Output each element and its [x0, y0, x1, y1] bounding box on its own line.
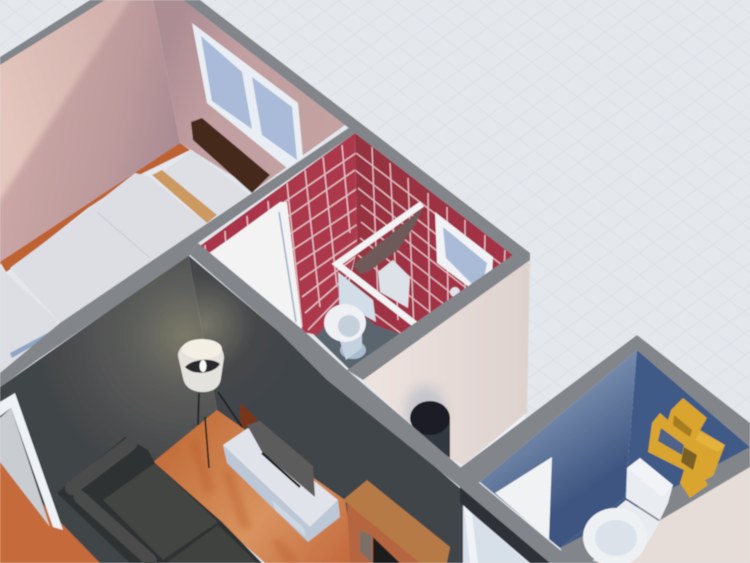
fireplace	[343, 480, 450, 563]
dark wall right	[188, 255, 480, 563]
shelf right highlight	[695, 432, 725, 452]
blue wall right	[560, 350, 750, 555]
bedroom window	[192, 23, 303, 168]
bedroom floor strip	[0, 143, 190, 272]
bath floor base	[312, 300, 412, 370]
room: living room	[0, 255, 480, 563]
lower doorway	[463, 505, 527, 563]
tap	[450, 287, 460, 297]
tile grout right	[352, 146, 506, 334]
shelf top opening	[673, 415, 692, 437]
shower rail	[337, 204, 422, 328]
pale exterior wall	[363, 258, 530, 465]
red tiled wall left	[197, 133, 357, 335]
wall: bedroom and bath back	[183, 0, 530, 380]
mattress	[10, 173, 207, 323]
doorway white frame	[0, 393, 63, 530]
shelf left opening	[658, 428, 684, 455]
pale wall lower right	[588, 467, 750, 563]
wall stripe	[463, 414, 527, 473]
toilet tank	[378, 260, 410, 308]
bed runner	[152, 170, 217, 223]
floor streaks	[190, 438, 300, 563]
pale wall bin shadow	[405, 386, 445, 434]
wall: bedroom divider	[0, 127, 355, 387]
shower glass	[338, 272, 376, 322]
waste bin	[410, 401, 450, 458]
shelf unit	[648, 398, 725, 498]
left room floor	[0, 460, 100, 563]
headboard	[191, 118, 270, 193]
shelf centre opening	[681, 447, 697, 470]
bathroom door	[210, 202, 302, 330]
blue bath toilet	[583, 458, 673, 563]
blue wall left	[480, 350, 637, 548]
bedroom right wall	[153, 0, 345, 190]
wall: blue room left	[460, 335, 637, 486]
red toilet	[324, 304, 366, 360]
room: bedroom	[0, 0, 345, 375]
tile grout left	[197, 145, 361, 330]
wall: top left	[0, 0, 105, 65]
shelf silhouette	[648, 398, 725, 498]
room: red bathroom	[197, 133, 515, 370]
floor lamp	[178, 339, 242, 468]
wall: blue room lower	[560, 447, 750, 563]
room: blue bathroom	[480, 350, 750, 555]
tv reflection	[240, 403, 258, 428]
sofa	[57, 437, 262, 563]
dark wall left	[0, 255, 217, 563]
bedroom wall light patch	[0, 0, 133, 215]
tv stand	[223, 428, 340, 542]
bedroom left wall	[0, 0, 180, 265]
wall: bathroom living divider	[190, 243, 600, 563]
pillow area	[162, 150, 250, 215]
tv	[247, 421, 315, 497]
side cabinet	[0, 267, 57, 375]
shower head speckle	[353, 208, 423, 274]
lower door dark edge	[460, 487, 550, 563]
living floor	[152, 410, 355, 563]
blue bath door	[495, 457, 552, 540]
bath window	[435, 212, 493, 290]
red tiled wall right	[345, 133, 513, 338]
wall: blue room right	[637, 335, 750, 447]
